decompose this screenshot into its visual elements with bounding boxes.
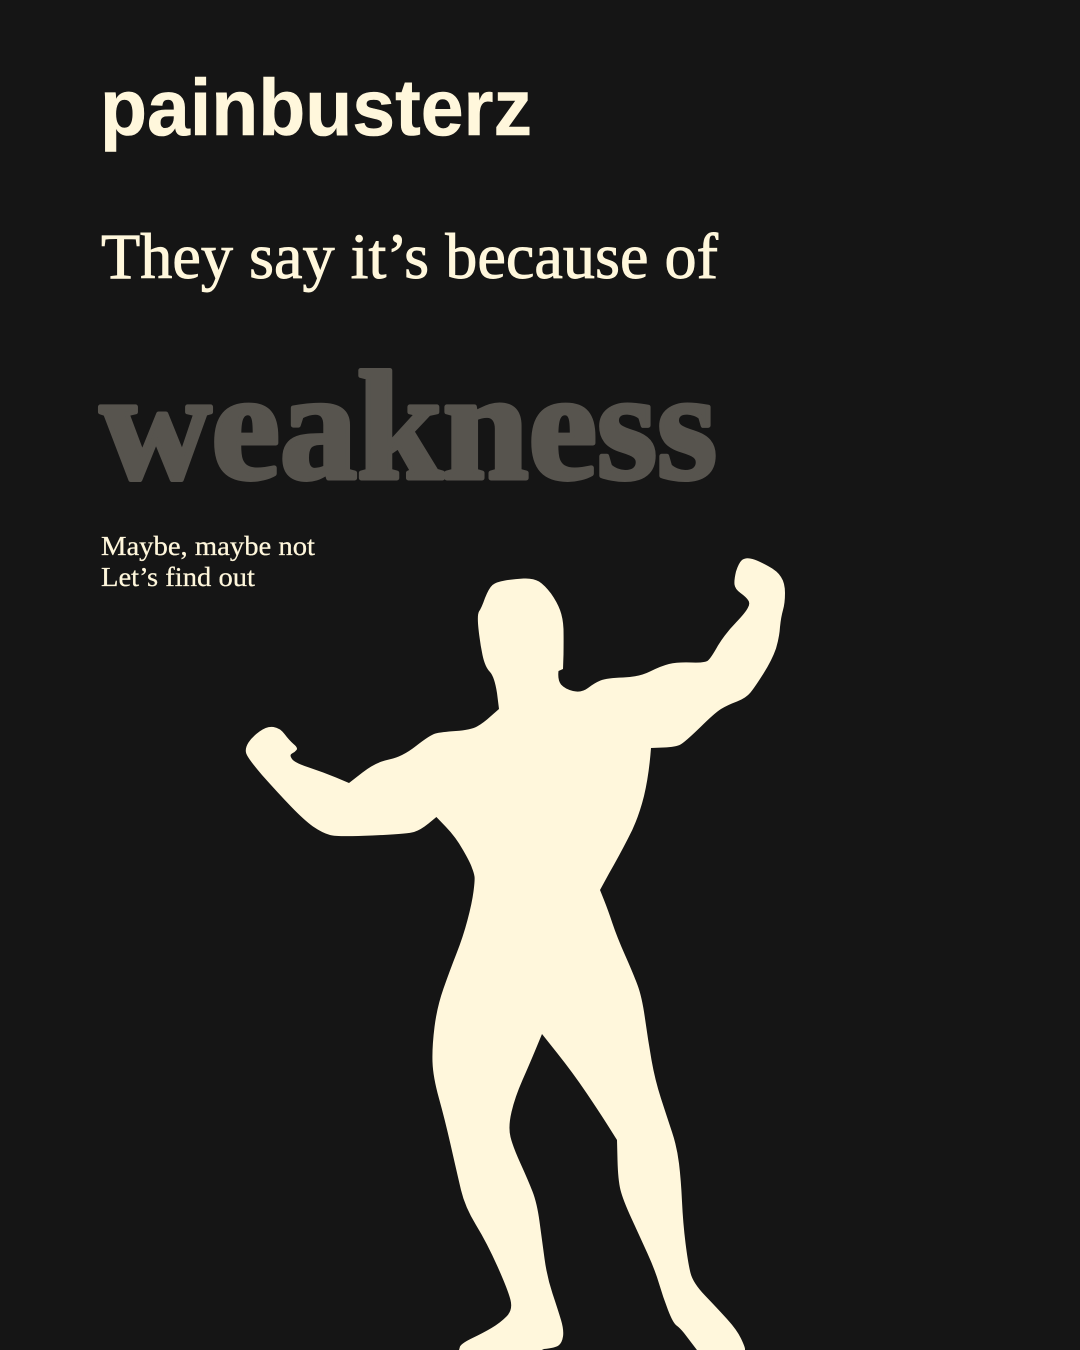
subtext: Let’s find out [101, 562, 256, 592]
subtext: Maybe, maybe not [101, 531, 316, 561]
logo: painbusterz: painbusterz [100, 63, 532, 152]
keyword: weakness: weakness [100, 340, 717, 512]
icon: flexing bodybuilder silhouette [246, 558, 785, 1350]
heading: They say it’s because of [101, 221, 718, 293]
subtext [101, 531, 316, 592]
